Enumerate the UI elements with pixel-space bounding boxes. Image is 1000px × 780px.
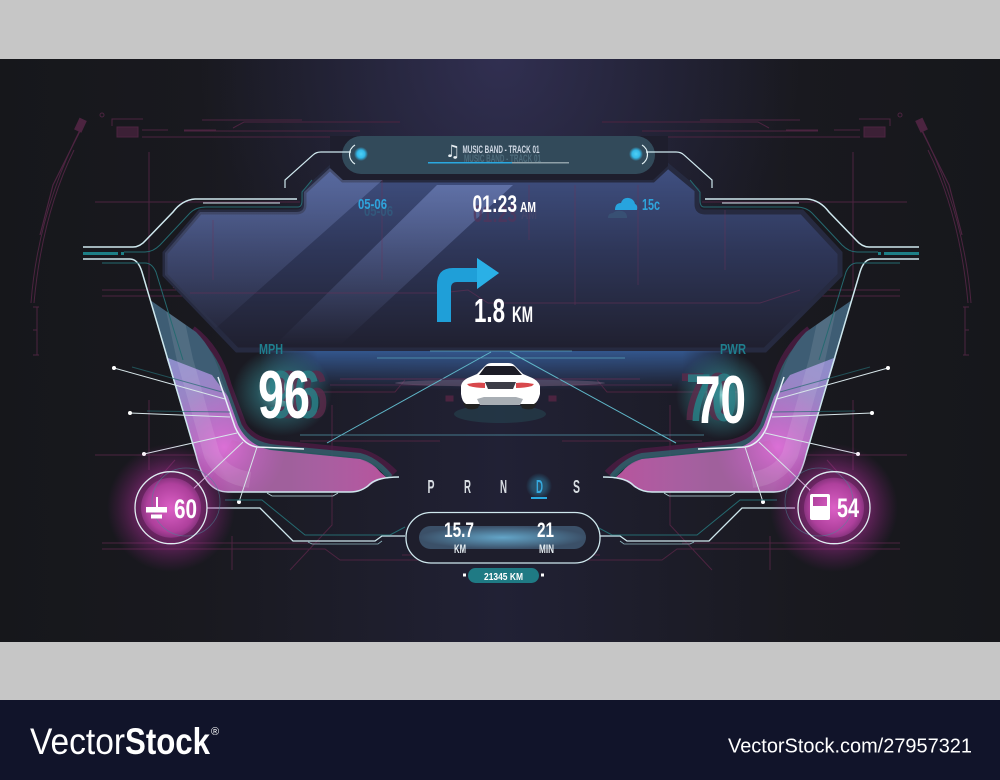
value 60: 60 [174,494,197,524]
gear selector: S [573,477,580,497]
gear selector: P [428,477,434,497]
label PWR: PWR [720,341,746,358]
leader dots [112,366,241,504]
footer image id: VectorStock.com/27957321 [728,736,972,758]
battery gauge left [107,444,235,572]
trip distance: 15.7 [444,519,474,542]
date: 05-06 [358,196,387,213]
footer logo: Vector [30,721,125,762]
footer logo: ® [211,726,219,738]
footer logo [30,721,219,762]
gear selector: R [464,477,471,497]
clock [472,191,537,228]
value 96: 96 [258,357,310,433]
gear selector [428,473,580,499]
horizon streak [395,380,605,386]
clock: 01:23 [472,191,517,218]
date [358,196,393,220]
speed gauge [232,341,332,436]
weather: 15c [642,197,660,214]
distance to turn: 1.8 [474,292,505,329]
gear selector: N [500,477,507,497]
label MPH: MPH [259,341,283,358]
date: 05-06 [364,203,393,220]
distance to turn: KM [512,302,533,327]
speed gauge: 96 [276,357,328,433]
track title: MUSIC BAND - TRACK 01 [462,144,540,156]
track title reflection: MUSIC BAND - TRACK 01 [464,153,541,165]
panel: right wing gauge [597,180,919,544]
icon: music note: ♫ [445,142,460,162]
trip distance: KM [454,542,466,556]
trip distance [444,519,474,556]
progress bar [428,162,569,164]
node right [629,145,647,164]
power gauge: 70 [686,360,737,436]
icon: turn arrow [437,258,499,322]
connector line right [646,152,712,188]
power gauge: 70 [680,359,731,435]
panel: music player [285,136,712,188]
value 70: 70 [695,362,746,438]
panel: trip info [406,512,600,563]
trip time [537,519,554,556]
speed gauge: 96 [268,357,320,433]
clock: AM [520,199,536,216]
odometer: 21345 KM [484,571,523,583]
icon: car [454,363,546,423]
lower connector lines [207,500,405,544]
weather [608,197,660,218]
icon: fuel cell [810,494,830,520]
active gear D [526,473,552,499]
leader lines [114,367,257,502]
upper edge lines [83,180,312,360]
footer bar [0,700,1000,780]
value 54: 54 [837,493,859,523]
odometer [463,568,544,583]
footer logo: Stock [125,721,210,762]
panel: left wing gauge [83,180,405,544]
circuit decoration left [31,113,800,570]
circuit decoration right [202,113,971,570]
connector line left [285,152,351,188]
panel: dashboard background [0,59,1000,642]
clock: AM [521,206,537,223]
power gauge [676,341,768,439]
clock: 01:23 [473,201,517,228]
fuel gauge right [770,444,898,572]
trip time: 21 [537,519,554,542]
trip time: MIN [539,542,554,556]
icon: cloud [615,198,637,210]
road perspective lines [300,351,704,443]
road horizon band [265,351,735,386]
panel: windshield glass [160,160,840,360]
active gear D: D [536,477,543,497]
node left [350,145,368,164]
icon: ground symbol [146,497,167,518]
panel: music bar backing [330,136,668,180]
